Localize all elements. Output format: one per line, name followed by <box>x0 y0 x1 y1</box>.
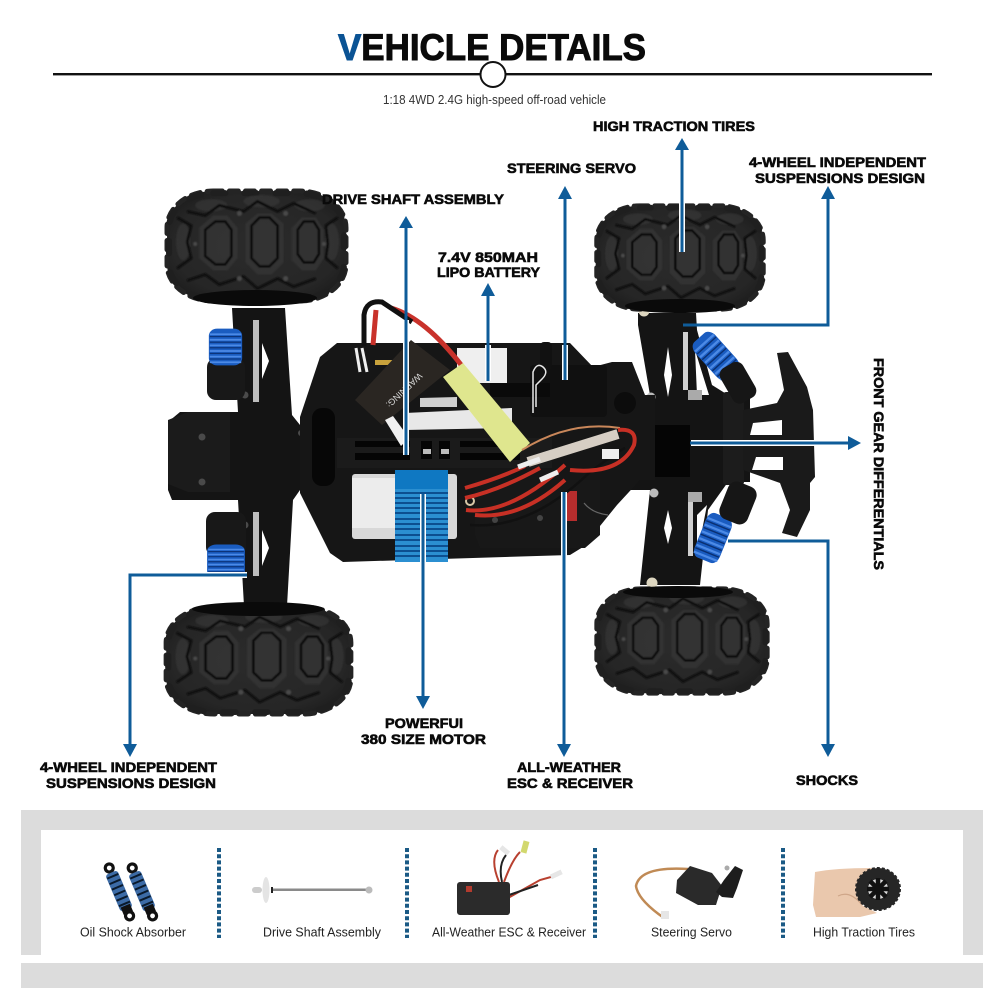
shock: rear upper <box>209 329 242 365</box>
chassis left hub <box>312 408 335 486</box>
caption: ESC and receiver: All-Weather ESC & Receiver <box>432 924 587 940</box>
label: shocks: SHOCKS <box>796 772 858 788</box>
battery <box>375 348 512 430</box>
tire: rear lower <box>166 602 351 714</box>
wires upper <box>356 302 462 372</box>
motor <box>352 470 474 562</box>
title rule with circle <box>53 62 932 87</box>
arrow: front gear differentials <box>690 436 861 450</box>
chassis rail <box>337 438 552 468</box>
RC truck photo <box>166 191 815 714</box>
title: VEHICLE DETAILS <box>338 27 646 68</box>
arrow: steering servo <box>558 186 572 380</box>
rear suspension left <box>168 308 304 606</box>
part: oil shock absorber <box>102 862 160 922</box>
label: high traction tires: HIGH TRACTION TIRES <box>593 118 755 134</box>
shock: front upper <box>689 329 759 407</box>
arrow: drive shaft <box>399 216 413 455</box>
chassis tub <box>300 343 655 562</box>
part: steering servo <box>636 866 743 919</box>
part: ESC and receiver <box>457 840 563 915</box>
yellow connector <box>443 363 530 462</box>
tire: front lower <box>597 586 767 693</box>
front bumper <box>743 352 815 537</box>
warning label <box>355 340 450 446</box>
steering servo <box>490 342 636 417</box>
arrow: motor <box>416 494 430 709</box>
caption: steering servo: Steering Servo <box>651 924 732 940</box>
label: right suspension: 4-WHEEL INDEPENDENT <box>749 154 926 170</box>
label: ESC and receiver <box>507 759 633 791</box>
tire: rear upper <box>167 191 346 306</box>
label: motor: POWERFUI <box>385 715 463 731</box>
subtitle: 1:18 4WD 2.4G high-speed off-road vehicle <box>383 92 606 107</box>
label: right suspension: SUSPENSIONS DESIGN <box>755 170 925 186</box>
tire: front upper <box>597 206 763 313</box>
label: ESC and receiver: ESC & RECEIVER <box>507 775 633 791</box>
label: left suspension: 4-WHEEL INDEPENDENT <box>40 759 217 775</box>
arrow: lipo battery <box>481 283 495 381</box>
label: right suspension <box>749 154 926 186</box>
caption: high traction tires: High Traction Tires <box>813 924 915 940</box>
part: high traction tires <box>813 868 900 917</box>
arrow: high traction tires <box>675 138 689 252</box>
arrow: right suspension <box>683 186 835 325</box>
caption: oil shock absorber: Oil Shock Absorber <box>80 924 187 940</box>
label: battery: 7.4V 850MAH <box>438 249 538 265</box>
label: front gear differentials: FRONT GEAR DIFFERENTIALS <box>871 358 887 570</box>
shock: rear lower <box>207 544 245 578</box>
label: drive shaft: DRIVE SHAFT ASSEMBLY <box>322 191 505 207</box>
label: steering servo: STEERING SERVO <box>507 160 636 176</box>
label: left suspension: SUSPENSIONS DESIGN <box>46 775 216 791</box>
ESC wires <box>465 426 635 525</box>
panel: parts strip <box>21 810 983 988</box>
arrow: left suspension <box>123 575 247 757</box>
front suspension right <box>628 306 750 588</box>
caption: drive shaft assembly: Drive Shaft Assembly <box>263 924 381 940</box>
label: left suspension <box>40 759 217 791</box>
part: drive shaft <box>252 877 372 903</box>
ESC box <box>475 480 608 548</box>
arrow: ESC and receiver <box>557 492 571 757</box>
label: battery: LIPO BATTERY <box>437 264 541 280</box>
label: motor: 380 SIZE MOTOR <box>361 731 486 747</box>
warning label: WARNING: <box>384 371 424 409</box>
label: battery <box>437 249 541 280</box>
label: motor <box>361 715 486 747</box>
arrow: shocks <box>728 541 835 757</box>
shock: front lower <box>692 479 759 565</box>
label: ESC and receiver: ALL-WEATHER <box>517 759 621 775</box>
